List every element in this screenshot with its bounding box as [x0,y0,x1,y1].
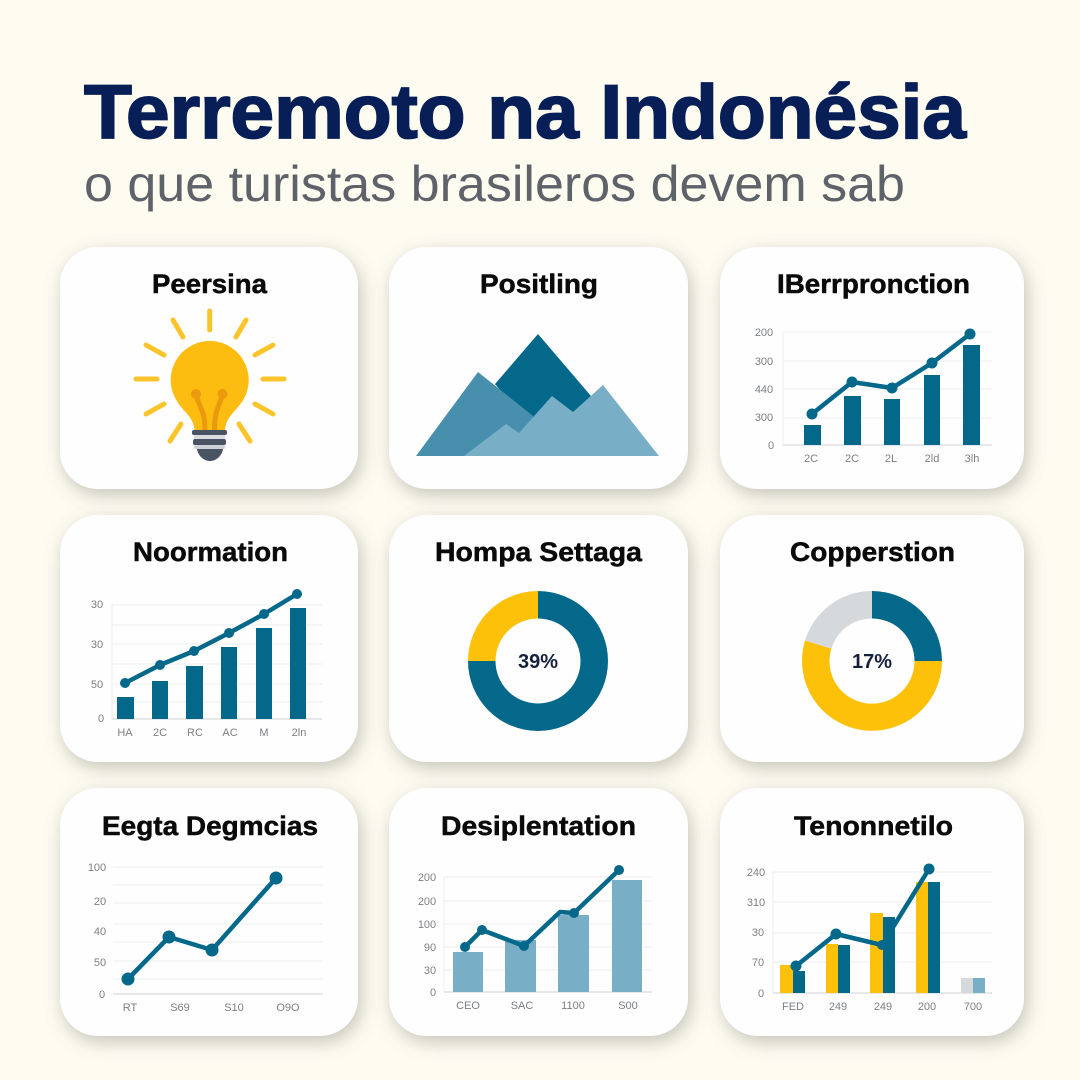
bar and line chart: 0 [768,440,774,452]
donut chart 39% [468,591,608,731]
bar and line chart: AC [222,727,238,739]
heading: Peersina: Peersina [152,269,268,299]
bar and line chart: 2ln [292,727,306,739]
bar and line chart: 300 [755,412,773,424]
grouped bar and line chart: 249 [829,1001,847,1013]
heading: Positling: Positling [480,269,598,299]
bar and line chart: 2C [804,453,818,465]
panel: Noormation [60,515,358,762]
bar and line chart: 2L [885,453,897,465]
donut chart 17%: 17% [852,651,892,673]
bar and line chart: 90 [424,942,436,954]
bar and line chart: 30 [91,639,103,651]
heading: Eegta Degmcias: Eegta Degmcias [102,811,318,841]
title: Terremoto na Indonésia [84,70,967,155]
heading: Hompa Settaga: Hompa Settaga [435,537,643,567]
grouped bar and line chart: 249 [874,1001,892,1013]
bar and line chart [91,589,322,739]
bar and line chart: 440 [755,384,773,396]
bar and line chart: CEO [456,1000,480,1012]
bar and line chart: 100 [418,919,436,931]
bar and line chart: 0 [430,987,436,999]
line chart [88,862,323,1014]
grouped bar and line chart: 240 [747,867,765,879]
grouped bar and line chart: 30 [752,927,764,939]
bar and line chart: M [259,727,269,739]
line chart: S69 [170,1002,190,1014]
bar and line chart: RC [187,727,203,739]
line chart: S10 [224,1002,244,1014]
bar and line chart: 2C [153,727,167,739]
line chart: 20 [94,896,106,908]
bar and line chart [418,865,652,1012]
bar and line chart: 30 [91,599,103,611]
bar and line chart: HA [117,727,133,739]
heading: Tenonnetilo: Tenonnetilo [794,811,953,841]
icon: mountains [416,334,659,456]
bar and line chart: 50 [91,679,103,691]
panel: Positling [389,247,688,489]
panel: Desiplentation [389,788,688,1036]
bar and line chart: SAC [511,1000,533,1012]
grouped bar and line chart: FED [782,1001,804,1013]
line chart: 100 [88,862,106,874]
bar and line chart: 300 [755,356,773,368]
bar and line chart: 2C [845,453,859,465]
icon: light bulb [136,311,284,461]
panel: Eegta Degmcias [60,788,358,1036]
grouped bar and line chart: 700 [964,1001,982,1013]
bar and line chart [755,327,992,465]
panel: Peersina [60,247,358,489]
line chart: RT [123,1002,138,1014]
grouped bar and line chart: 0 [758,988,764,1000]
grouped bar and line chart: 70 [752,957,764,969]
bar and line chart: 200 [755,327,773,339]
bar and line chart: 3lh [965,453,979,465]
subtitle: o que turistas brasileros devem sab [84,156,905,212]
donut chart 39%: 39% [518,651,558,673]
panel: Hompa Settaga [389,515,688,762]
bar and line chart: 200 [418,896,436,908]
donut chart 17% [802,591,942,731]
panel: IBerrpronction [720,247,1024,489]
line chart: 50 [94,957,106,969]
heading: Copperstion: Copperstion [790,537,955,567]
bar and line chart: 30 [424,965,436,977]
bar and line chart: 2ld [925,453,939,465]
heading: IBerrpronction: IBerrpronction [777,269,970,299]
bar and line chart: 200 [418,872,436,884]
line chart: O9O [276,1002,300,1014]
panel: Tenonnetilo [720,788,1024,1036]
grouped bar and line chart: 310 [747,897,765,909]
grouped bar and line chart [747,864,992,1013]
line chart: 40 [94,926,106,938]
bar and line chart: 0 [98,713,104,725]
grouped bar and line chart: 200 [918,1001,936,1013]
bar and line chart: S00 [618,1000,638,1012]
line chart: 0 [99,989,105,1001]
heading: Desiplentation: Desiplentation [441,811,636,841]
panel: Copperstion [720,515,1024,762]
bar and line chart: 1100 [561,1000,585,1012]
heading: Noormation: Noormation [133,537,288,567]
